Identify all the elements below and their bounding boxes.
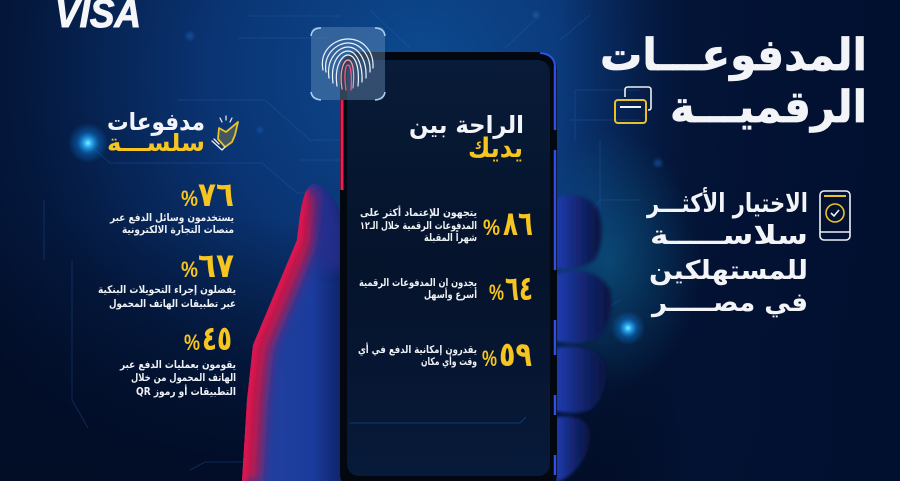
stat: 59 percent: وقت وأي مكان (421, 354, 477, 368)
stat: 76 percent: يستخدمون وسائل الدفع عبر (109, 212, 234, 224)
subtitle: للمستهلكين (649, 256, 808, 286)
heading: seamless payments: سلســـة (107, 129, 205, 157)
stat: 64 percent: % (489, 280, 504, 305)
stat: 64 percent: يجدون ان المدفوعات الرقمية (359, 277, 477, 289)
heading: seamless payments (107, 108, 205, 157)
stat: 64 percent (359, 269, 533, 309)
stat: 45 percent (119, 319, 236, 398)
subtitle: سلاســـــة (650, 221, 808, 251)
stat: 59 percent: ٥٩ (499, 335, 532, 375)
stat: 86 percent: شهراً المقبلة (424, 230, 477, 244)
phone heading: الراحة بين (409, 111, 524, 139)
stat: 45 percent: ٤٥ (202, 319, 232, 359)
glow node: left (68, 123, 108, 163)
stat: 76 percent (109, 175, 234, 236)
stat: 59 percent: % (482, 346, 497, 371)
phone heading (409, 111, 524, 164)
icon: tapping hand (212, 116, 238, 150)
icon: cards (615, 87, 651, 123)
stat: 64 percent: أسرع وأسهل (424, 287, 477, 301)
icon: fingerprint scanner (311, 27, 385, 100)
stat: 45 percent: يقومون بعمليات الدفع عبر (119, 359, 236, 371)
stat: 86 percent: ٨٦ (503, 204, 533, 244)
hand: right fingers (555, 195, 611, 481)
stat: 67 percent: ٦٧ (198, 246, 234, 286)
stat: 76 percent: منصات التجارة الالكترونية (122, 224, 234, 236)
hand: palm and thumb (242, 184, 342, 481)
stat: 67 percent: يفضلون إجراء التحويلات البنكية (98, 284, 236, 296)
stat: 67 percent: % (181, 257, 198, 282)
subtitle (645, 187, 808, 318)
stat: 86 percent: % (483, 215, 500, 240)
stat: 64 percent: ٦٤ (505, 269, 533, 309)
glow node: right (611, 311, 645, 345)
phone heading: يديك (468, 133, 523, 164)
icon: phone check (820, 191, 850, 240)
heading: seamless payments: مدفوعات (107, 108, 205, 136)
title (600, 30, 867, 133)
stat: 59 percent (358, 335, 532, 375)
stat: 45 percent: % (184, 330, 200, 355)
title: المدفوعـــات (600, 30, 867, 81)
stat: 76 percent: ٧٦ (198, 175, 234, 215)
stat: 86 percent: المدفوعات الرقمية خلال الـ١٢ (360, 220, 477, 232)
stat: 76 percent: % (181, 186, 198, 211)
stat: 86 percent: يتجهون للإعتماد أكثر على (360, 205, 477, 219)
stat: 59 percent: يقدرون إمكانية الدفع في أي (358, 342, 477, 356)
stat: 67 percent: عبر تطبيقات الهاتف المحمول (109, 298, 236, 310)
stat: 45 percent: التطبيقات أو رموز QR (136, 384, 236, 398)
red phone edge light (340, 100, 344, 190)
stat: 86 percent (360, 204, 533, 244)
stat: 45 percent: الهاتف المحمول من خلال (131, 372, 236, 384)
stat: 67 percent (98, 246, 236, 310)
subtitle: في مصـــــر (650, 288, 808, 318)
subtitle: الاختيار الأكثـــر (645, 187, 808, 219)
phone (340, 52, 557, 481)
title: الرقميـــة (670, 82, 867, 133)
